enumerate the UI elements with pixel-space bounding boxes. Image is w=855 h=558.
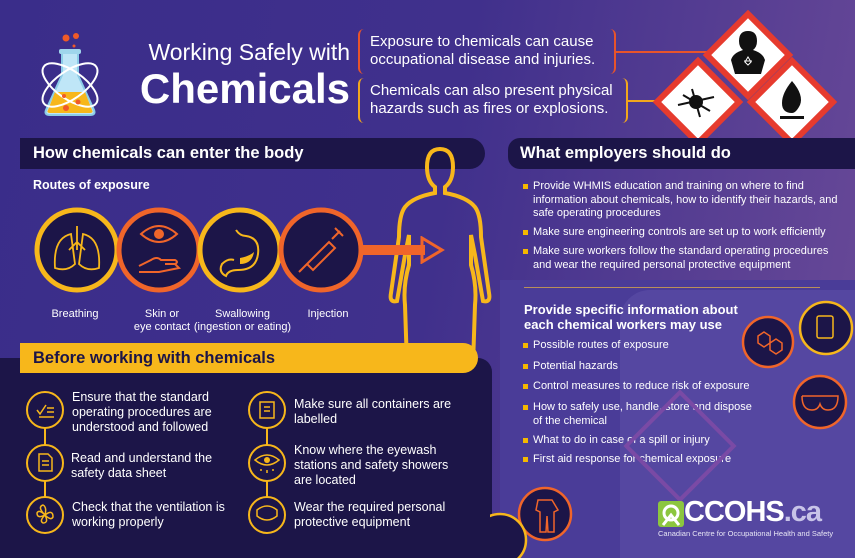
heading: specific info: each chemical workers may use [524, 317, 722, 332]
text: Breathing [51, 308, 99, 320]
heading: specific info [524, 302, 738, 332]
title: Working Safely with [148, 39, 350, 65]
icons: right side circles [490, 300, 854, 558]
icon: body outline [388, 147, 492, 350]
text: Read and understand the safety data sheet [71, 451, 212, 480]
logo: CCOHS: CCOHS.ca [684, 496, 821, 528]
list: specific info: How to safely use, handle, store and dispose of the chemical [533, 401, 752, 426]
icon: hazard diamonds [652, 10, 838, 138]
icon: syringe [278, 208, 364, 292]
connector lines [616, 51, 716, 53]
background right panel shape [500, 280, 855, 558]
list: employer duties: Make sure engineering controls are set up to work efficiently [533, 226, 826, 238]
callout: exposure: Exposure to chemicals can cause occupational disease and injuries. [370, 33, 595, 68]
list: specific info: Control measures to reduce risk of exposure [533, 380, 749, 392]
callout: physical hazards: Chemicals can also present physical hazards such as fires or explosions. [370, 82, 613, 117]
text: eye contact [134, 321, 190, 333]
list: specific info [523, 339, 752, 465]
arrow [363, 236, 445, 264]
item texts: Ensure that the standard operating procedures are understood and followed [72, 390, 212, 434]
text: Skin or [145, 308, 179, 320]
heading: how chemicals enter [20, 138, 485, 169]
callout: exposure [358, 29, 616, 74]
text: routes of exposure: Routes of exposure [33, 178, 150, 192]
heading: how chemicals enter: How chemicals can enter the body [33, 144, 304, 162]
heading: specific info: Provide specific information about [524, 302, 738, 317]
logo: CCOHS [658, 496, 834, 538]
text: Know where the eyewash stations and safety showers are located [294, 443, 448, 487]
route labels [51, 308, 348, 333]
heading: employers [508, 138, 855, 169]
logo: CCOHS: Canadian Centre for Occupational Health and Safety [658, 529, 833, 538]
list: employer duties: Provide WHMIS education and training on where to find information about chemicals, how to identify their hazards, and safe operating procedures [533, 180, 838, 219]
list: specific info: What to do in case of a spill or injury [533, 434, 710, 446]
icon: lungs [34, 208, 118, 292]
text: Swallowing [215, 308, 270, 320]
icon: stomach [198, 208, 280, 292]
icon: eye and hand [116, 208, 200, 292]
heading: before working [20, 343, 478, 373]
text: (ingestion or eating) [194, 321, 291, 333]
panel: before working [0, 358, 492, 558]
connector lines left [44, 428, 46, 498]
title: Chemicals [140, 65, 350, 112]
heading: before working: Before working with chemicals [33, 349, 275, 367]
route circles [34, 208, 364, 292]
list: employer duties [523, 180, 838, 270]
heading: employers: What employers should do [520, 144, 731, 162]
text: Check that the ventilation is working properly [72, 500, 225, 529]
list: specific info: Possible routes of exposure [533, 339, 669, 351]
list: specific info: First aid response for chemical exposure [533, 453, 731, 465]
item icons [26, 391, 286, 534]
text: Wear the required personal protective equipment [294, 500, 445, 529]
list: specific info: Potential hazards [533, 360, 618, 372]
callout: physical hazards [358, 78, 628, 123]
title [140, 39, 350, 112]
text: Make sure all containers are labelled [294, 397, 451, 426]
list: employer duties: Make sure workers follow the standard operating procedures and wear the required personal protective equipment [533, 245, 828, 270]
text: Injection [308, 308, 348, 320]
icon: flask [42, 33, 98, 116]
